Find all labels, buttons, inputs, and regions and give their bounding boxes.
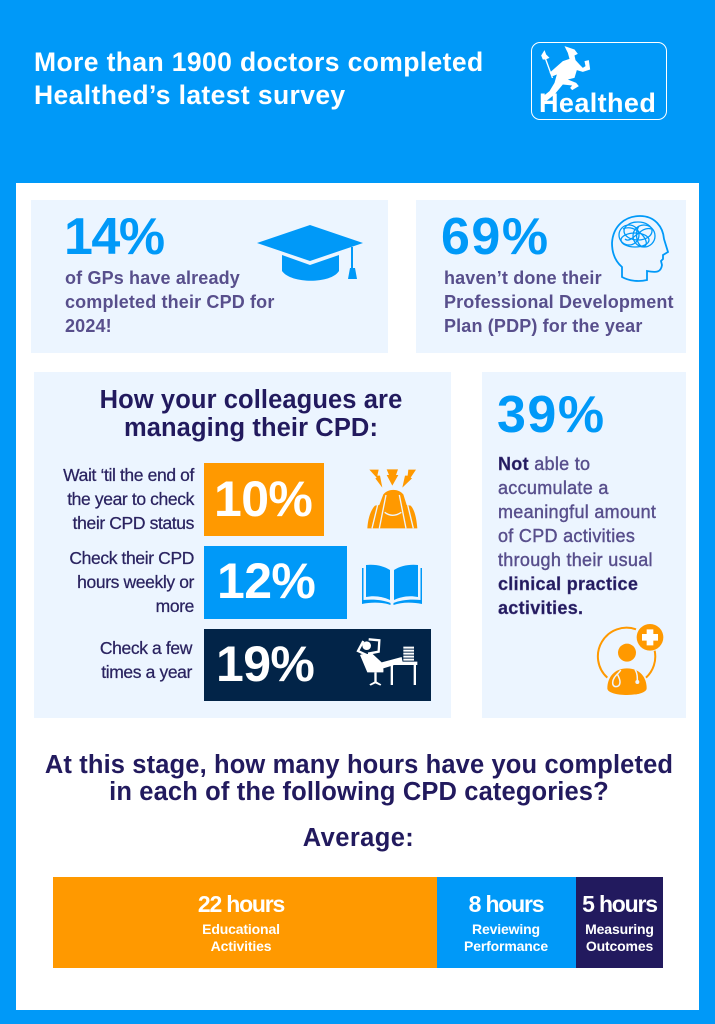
category: Measuring xyxy=(585,921,654,937)
text: PDP not done: Plan (PDP) for the year xyxy=(444,316,642,336)
panel: 39% not able xyxy=(482,372,686,718)
bar: 10% xyxy=(204,463,324,536)
bar: 12% xyxy=(204,546,347,619)
heading: managing their CPD: xyxy=(124,414,378,442)
value: 5 hours xyxy=(582,891,657,917)
label: times a year xyxy=(101,662,192,682)
value: 19% xyxy=(216,636,314,692)
value: 8 hours xyxy=(469,891,543,917)
icon: graduation cap xyxy=(257,225,363,281)
text: PDP not done: Professional Development xyxy=(444,292,674,312)
heading: How your colleagues are xyxy=(100,386,402,414)
heading xyxy=(100,386,402,442)
category: Outcomes xyxy=(586,938,653,954)
icon: doctor with plus xyxy=(596,624,664,695)
icon: head with tangled brain xyxy=(611,215,669,282)
text: GPs completed CPD: 2024! xyxy=(65,316,112,336)
label xyxy=(63,465,195,533)
label: Check their CPD xyxy=(69,548,194,568)
text: clinical practice: of CPD activities xyxy=(498,526,635,546)
logo: Healthed xyxy=(531,42,667,120)
bar: 19% xyxy=(204,629,431,701)
label: Check a few xyxy=(100,638,192,658)
text: GPs completed CPD: completed their CPD for xyxy=(65,292,274,312)
text: PDP not done xyxy=(444,268,674,336)
label xyxy=(69,548,194,616)
segment: measuring xyxy=(576,877,663,968)
panel: how colleagues manage CPD xyxy=(34,372,451,718)
icon: open book xyxy=(362,564,422,605)
label: the year to check xyxy=(67,489,194,509)
heading: hours question xyxy=(45,751,673,806)
panel: 14% of GPs xyxy=(31,200,388,353)
text: PDP not done: haven’t done their xyxy=(444,268,602,288)
icon: running figure xyxy=(541,46,590,101)
segment: educational xyxy=(53,877,437,968)
text: clinical practice: activities. xyxy=(498,598,583,618)
stat: 14%: 14% xyxy=(64,208,164,266)
row: weekly xyxy=(69,546,422,619)
bar: 12%: 12% xyxy=(217,553,315,609)
label: Wait ‘til the end of xyxy=(63,465,194,485)
title xyxy=(34,47,484,110)
row: few times a year xyxy=(100,629,431,701)
stacked bar: hours xyxy=(53,877,663,968)
subheading: average: Average: xyxy=(303,824,414,852)
text: clinical practice: through their usual xyxy=(498,550,653,570)
category xyxy=(202,921,280,954)
text: GPs completed CPD: of GPs have already xyxy=(65,268,240,288)
logo wordmark: Healthed xyxy=(539,88,656,118)
stat: 69%: 69% xyxy=(441,208,550,266)
label: hours weekly or xyxy=(77,572,194,592)
text: clinical practice: meaningful amount xyxy=(498,502,656,522)
text: clinical practice: accumulate a xyxy=(498,478,609,498)
label: more xyxy=(156,596,194,616)
label xyxy=(100,638,192,682)
text: clinical practice: Not able to xyxy=(498,454,590,474)
title: Healthed’s latest survey xyxy=(34,80,346,110)
icon: relaxed at desk xyxy=(356,638,418,686)
value: 22 hours xyxy=(198,891,284,917)
category: Activities xyxy=(211,938,271,954)
row: end of year xyxy=(63,463,418,536)
category: Performance xyxy=(464,938,548,954)
segment: reviewing xyxy=(437,877,576,968)
panel: 69% no PDP xyxy=(416,200,686,353)
bar: 10%: 10% xyxy=(214,471,312,527)
title: More than 1900 doctors completed xyxy=(34,47,484,77)
category xyxy=(464,921,548,954)
stat: 39%: 39% xyxy=(497,386,606,444)
icon: stressed person xyxy=(367,469,418,528)
text: GPs completed CPD xyxy=(65,268,274,336)
white content area xyxy=(16,183,699,1010)
category: Reviewing xyxy=(472,921,540,937)
text: clinical practice: clinical practice xyxy=(498,574,638,594)
label: their CPD status xyxy=(73,513,194,533)
text: clinical practice xyxy=(498,454,656,618)
heading: hours question: in each of the following CPD categories? xyxy=(109,778,609,806)
category: Educational xyxy=(202,921,280,937)
category xyxy=(585,921,654,954)
heading: hours question: At this stage, how many hours have you completed xyxy=(45,751,673,779)
